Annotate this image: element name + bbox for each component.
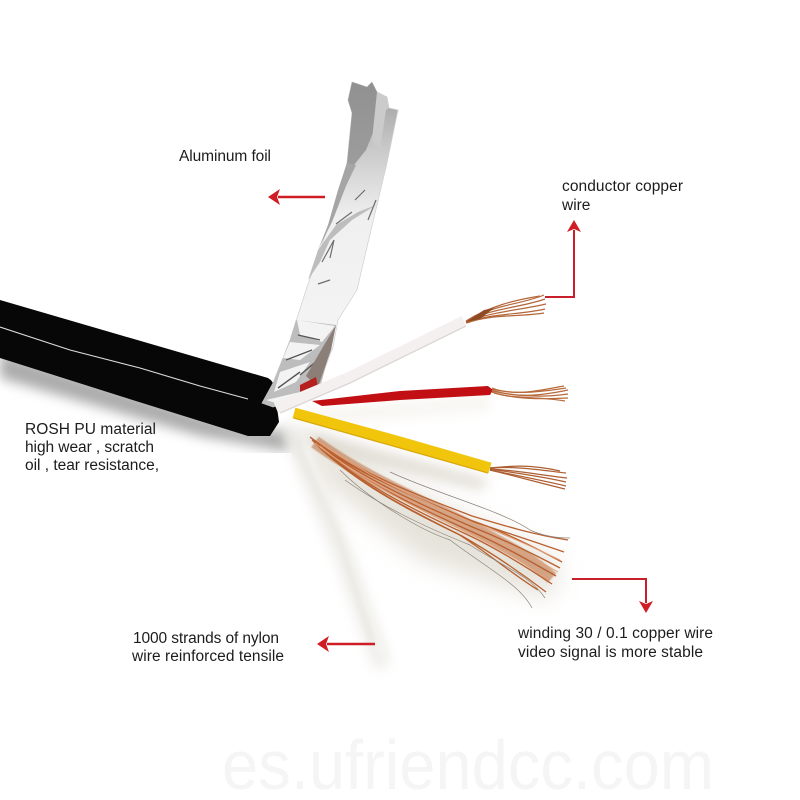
aluminum foil	[262, 82, 398, 407]
cable black PU jacket	[0, 300, 279, 436]
yellow wire copper strands	[490, 466, 567, 489]
arrow: nylon wire	[317, 636, 375, 652]
red wire copper strands	[492, 386, 568, 401]
label: conductor copper wire	[561, 178, 683, 214]
shadows	[0, 352, 560, 600]
label: ROSH PU material: ROSH PU material	[25, 421, 156, 438]
white wire	[276, 295, 546, 413]
shadow mask behind the text	[0, 453, 292, 533]
arrow: conductor copper wire	[545, 220, 581, 297]
red wire	[312, 386, 568, 406]
label: winding copper wire: winding 30 / 0.1 copper wire	[517, 625, 713, 642]
label: conductor copper wire: conductor copper	[562, 178, 683, 195]
label: nylon wire	[131, 630, 284, 665]
label: conductor copper wire: wire	[561, 197, 590, 214]
label: ROSH PU material	[25, 421, 159, 474]
label: nylon wire: 1000 strands of nylon	[133, 630, 279, 647]
white wire copper strands	[466, 295, 546, 323]
label: nylon wire: wire reinforced tensile	[131, 648, 284, 665]
label: winding copper wire	[517, 625, 713, 661]
label: aluminum foil: Aluminum foil	[179, 148, 271, 165]
label: ROSH PU material: high wear , scratch	[25, 439, 154, 456]
label: winding copper wire: video signal is more stable	[518, 644, 703, 661]
nylon reinforcement strands	[292, 432, 384, 660]
label: ROSH PU material: oil , tear resistance,	[25, 457, 159, 474]
arrow: winding copper wire	[572, 579, 653, 613]
copper braid winding	[310, 437, 570, 608]
arrow: aluminum foil	[268, 189, 325, 205]
yellow wire	[294, 413, 567, 489]
